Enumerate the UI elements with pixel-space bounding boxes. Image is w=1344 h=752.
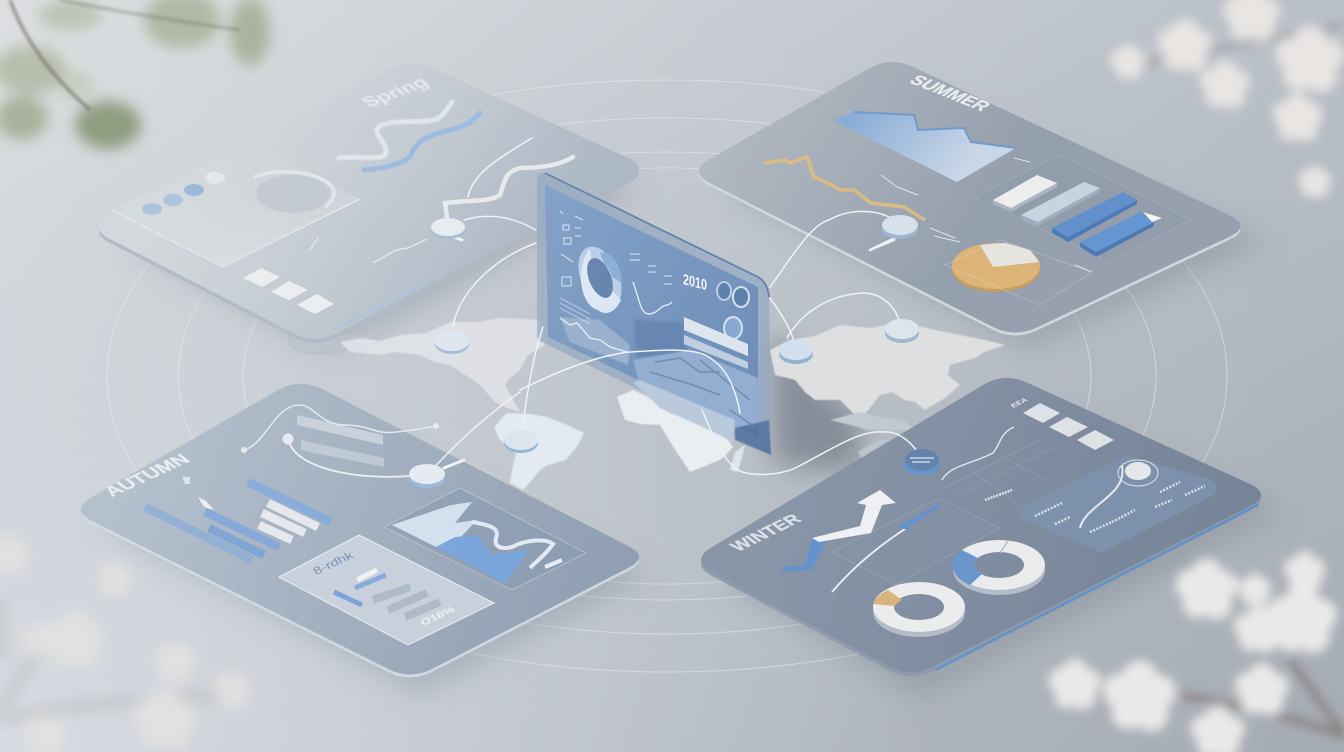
small callout lines [870,158,1092,305]
small pin line [309,238,318,251]
Eurasia [770,322,1005,420]
node: autumn [409,464,445,488]
sparkline [373,239,427,263]
card value: O16% [419,605,457,628]
donut chart [570,240,630,316]
screen bars [684,317,748,369]
route line with grid [940,427,1055,505]
flow curves and strips [241,405,439,477]
heading: Spring: Spring [358,74,434,111]
Madagascar [730,445,745,472]
icon row [142,172,225,215]
central tablet [537,173,771,455]
heading: WINTER: WINTER [725,511,805,554]
screen line curves [560,282,672,352]
map nodes [409,215,940,488]
node: asia west [779,340,813,364]
heading: SUMMER: SUMMER [904,73,995,115]
screen icon column [560,211,672,324]
small gauges [717,282,749,339]
light inner card [111,140,360,267]
Southeast Asia [830,412,925,436]
light chart area [560,317,630,365]
connection lines [427,138,922,475]
node: north america [435,331,469,354]
Europe map on screen [633,350,758,427]
wave chart [339,102,480,170]
top-left branch stem [10,0,240,110]
bottom-right blossoms [1049,551,1344,752]
Africa [617,390,733,472]
panel: Summer [699,62,1240,335]
South America [494,413,584,490]
small label: EEA [1009,396,1029,409]
screen [545,185,758,437]
concentric rings [107,80,1227,672]
edge accent [935,505,1258,670]
bottom-left blossoms [0,534,251,752]
donut: bottom [873,582,965,637]
panel shadows [100,90,1285,700]
inner route card [1030,460,1208,543]
bottom dark corner [735,420,771,455]
tiles [1023,403,1114,450]
node: spring [431,218,465,239]
top-right blossoms [1110,0,1344,198]
card title: 8-rdhk [310,549,356,577]
Australia [858,440,915,468]
horizontal bars [975,155,1190,262]
node: summer [882,215,918,239]
upper dark map band [634,320,690,358]
year label: 2010 [683,271,707,294]
bar chart [145,477,331,560]
trend arrows [781,490,1000,592]
panel: Winter [701,378,1261,676]
North Africa [633,380,735,442]
spring pedestal [290,335,380,353]
node: asia east [885,319,919,343]
area chart [384,488,586,590]
donut: top [952,540,1045,595]
pie chart [952,243,1040,292]
light table card [279,535,494,645]
node: south america [504,430,538,453]
tiles [243,268,334,314]
heading: AUTUMN: AUTUMN [100,452,195,500]
node: australia [904,449,940,475]
panel: Spring [99,63,639,343]
North America [340,318,545,412]
edge accent [332,278,436,330]
gold line chart [764,157,925,220]
ring gauge [254,172,334,213]
area chart [832,112,1016,182]
panel: Autumn [81,384,639,678]
world map [340,318,1005,490]
top-left branch and leaves [0,0,270,149]
